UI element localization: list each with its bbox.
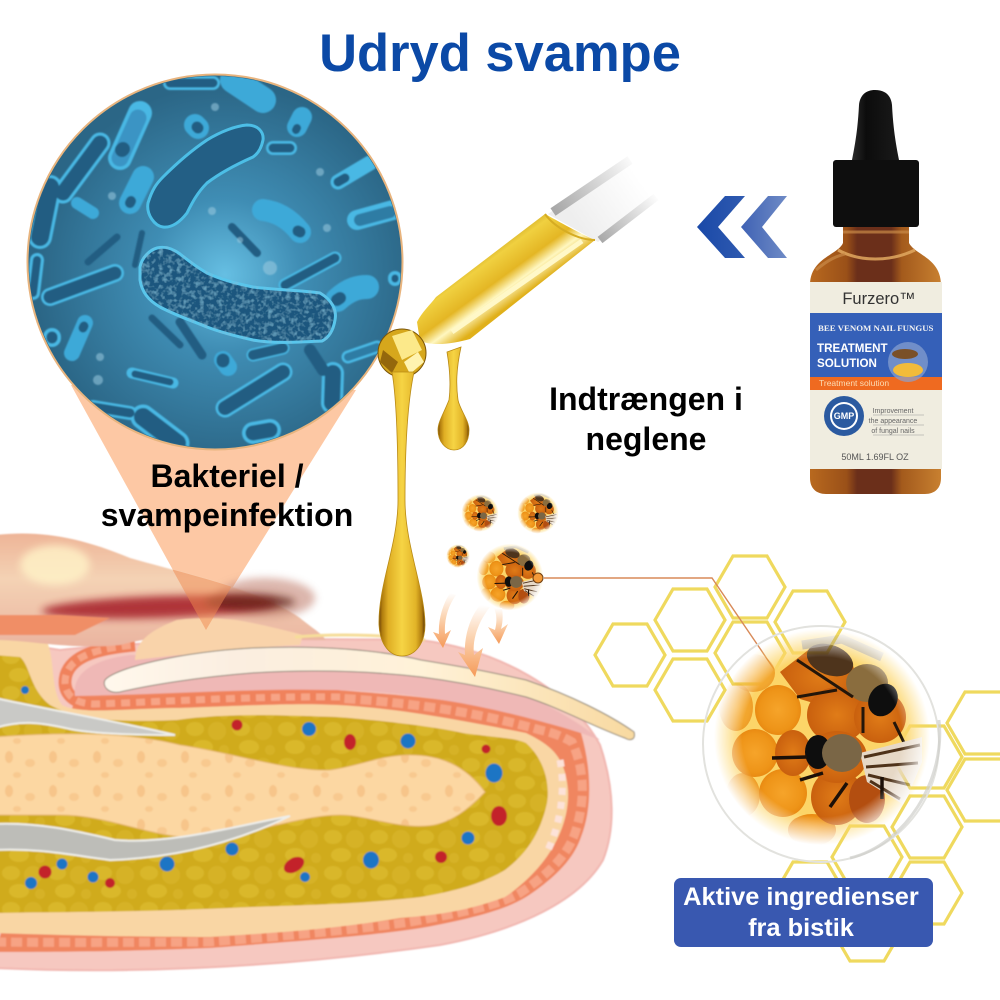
cuticle growth: [135, 618, 303, 660]
callout cone from infection to magnifier: [71, 385, 356, 630]
outer skin: [0, 639, 612, 970]
icon: small honey ball 1: [461, 494, 499, 532]
bright bacteria bodies: [72, 80, 367, 367]
product bottle: SOLUTION: [817, 357, 877, 370]
bacteria outlines: [33, 83, 395, 443]
icon: small honey drip: [438, 347, 469, 450]
orange band: [810, 377, 942, 390]
tip droplet: [378, 329, 426, 377]
connector dot: [533, 573, 543, 583]
glass tube: [548, 158, 656, 242]
main bacterium: [140, 247, 335, 342]
callout: active ingredients button: Aktive ingredienser: [683, 883, 919, 911]
finger bone: [0, 734, 485, 838]
callout cone overlay on skin: [172, 570, 232, 630]
text: penetration label: neglene: [586, 421, 706, 457]
claim text: Improvement: [873, 408, 913, 415]
icon: small honey ball 2: [517, 492, 559, 534]
decoration: honeycomb hexagons: [595, 556, 1000, 961]
text: infection label: [101, 458, 353, 533]
claim text: [869, 408, 924, 435]
blood vessels: red: [38, 720, 507, 888]
claim text: of fungal nails: [871, 428, 915, 435]
icon: long honey drip: [379, 372, 425, 656]
upper large bacterium: [148, 125, 263, 227]
blue band: [810, 313, 942, 377]
product bottle: [810, 90, 942, 494]
upper skin fold: [0, 533, 326, 646]
yellow fat tissue: [0, 655, 548, 913]
title: Udryd svampe: [319, 24, 681, 83]
nail fold ring: [65, 645, 340, 704]
nail bed: [75, 655, 600, 740]
orange dermis band: [0, 689, 589, 952]
text: penetration label: [549, 381, 743, 457]
lower tendon: [0, 816, 290, 860]
product bottle: TREATMENT: [817, 342, 888, 355]
black cap: [833, 160, 919, 227]
text: penetration label: Indtrængen i: [549, 381, 743, 417]
text: infection label: svampeinfektion: [101, 497, 353, 533]
connector line: [533, 573, 793, 697]
icon: small honey ball 3: [446, 544, 470, 568]
cream layer: [0, 625, 568, 937]
diagram: nail cross section: [0, 533, 634, 970]
panel: glass sphere with bees and honeycomb: [703, 626, 940, 862]
blood vessels: blue: [21, 686, 502, 889]
bacteria dark cores: [33, 83, 395, 443]
panel: bacteria magnifier circle: [28, 74, 402, 450]
bottle glass: [810, 227, 941, 494]
label bee icon: [888, 342, 928, 382]
volume: 50ML 1.69FL OZ: [841, 452, 909, 462]
callout: active ingredients button: [674, 878, 933, 947]
icon: chevrons pointing to bottle: [697, 196, 787, 258]
callout: active ingredients button: fra bistik: [748, 914, 855, 942]
claim text: the appearance: [869, 418, 917, 425]
nail plate: [104, 647, 634, 740]
icon: medium honey ball: [477, 544, 543, 611]
dropper bulb: [852, 90, 899, 160]
band text: BEE VENOM NAIL FUNGUS: [818, 323, 934, 333]
honey in tube: [417, 214, 595, 344]
particles: [93, 103, 331, 385]
brand: Furzero™: [842, 290, 916, 308]
GMP badge: GMP: [834, 411, 854, 421]
icon: dropper: [378, 158, 656, 377]
upper tendon: [0, 698, 175, 735]
product bottle: Treatment solution: [819, 378, 889, 388]
text: infection label: Bakteriel /: [151, 458, 304, 494]
arrows: penetration into nail: [433, 593, 508, 677]
label: [810, 282, 942, 469]
GMP badge: [824, 396, 864, 436]
